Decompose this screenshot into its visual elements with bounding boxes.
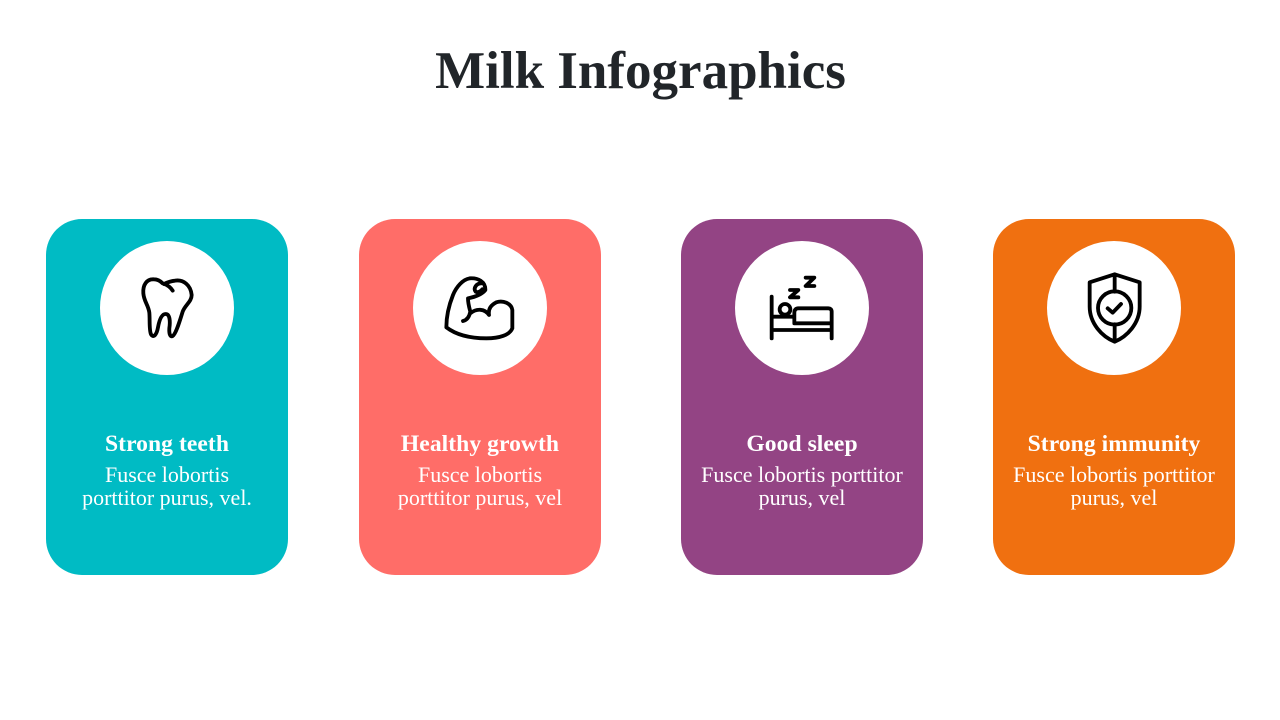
text: good sleep: purus, vel	[759, 485, 845, 510]
text: good sleep	[701, 462, 903, 510]
text: strong teeth: Fusce lobortis	[105, 462, 229, 487]
text: strong immunity: purus, vel	[1071, 485, 1157, 510]
heading: healthy growth: Healthy growth	[401, 431, 559, 457]
panel: good sleep	[681, 219, 923, 575]
heading: strong teeth: Strong teeth	[105, 431, 229, 457]
heading: strong immunity: Strong immunity	[1028, 431, 1200, 457]
text: strong immunity: Fusce lobortis porttitor	[1013, 462, 1215, 487]
icon: flexed arm	[413, 241, 547, 375]
icon: tooth	[100, 241, 234, 375]
text: healthy growth: Fusce lobortis	[418, 462, 542, 487]
title: Milk Infographics	[435, 42, 846, 100]
panel: strong immunity	[993, 219, 1235, 575]
text: strong teeth: porttitor purus, vel.	[82, 485, 252, 510]
text: strong teeth	[82, 462, 252, 510]
icon: bed with sleeper	[735, 241, 869, 375]
text: healthy growth	[398, 462, 562, 510]
heading: good sleep: Good sleep	[746, 431, 858, 457]
icon: shield with check	[1047, 241, 1181, 375]
text: strong immunity	[1013, 462, 1215, 510]
text: good sleep: Fusce lobortis porttitor	[701, 462, 903, 487]
panel: healthy growth	[359, 219, 601, 575]
panel: strong teeth	[46, 219, 288, 575]
text: healthy growth: porttitor purus, vel	[398, 485, 562, 510]
